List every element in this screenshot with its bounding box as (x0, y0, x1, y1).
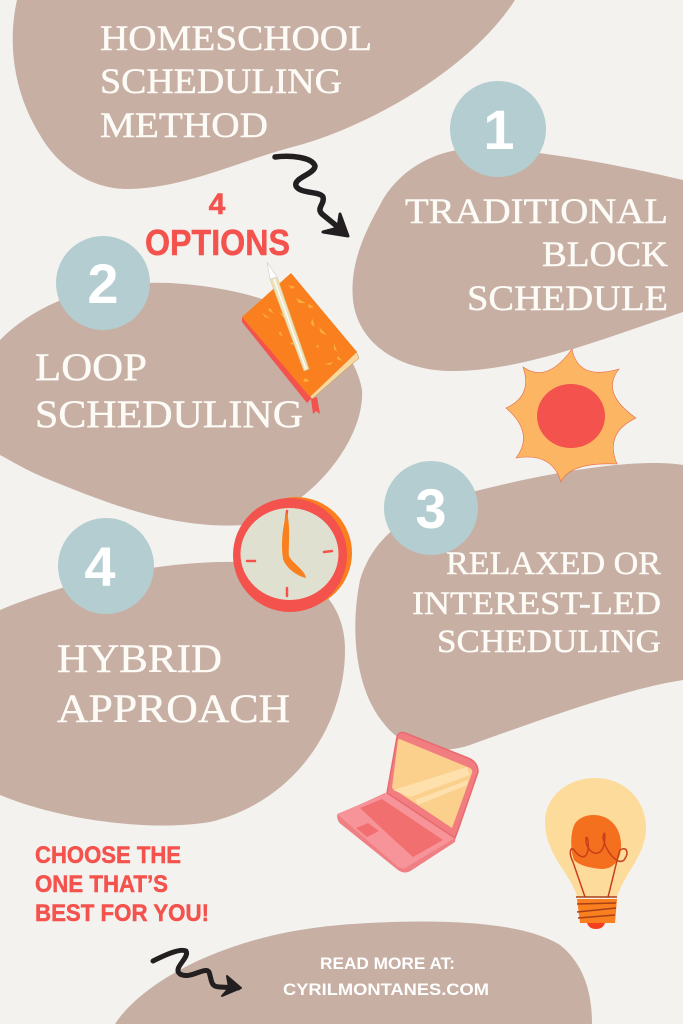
heading: loop scheduling: LOOP (35, 346, 147, 389)
heading: loop scheduling: SCHEDULING (35, 393, 303, 436)
heading: hybrid approach (57, 636, 290, 731)
callout: choose the one that's best for you (35, 842, 209, 927)
icon: orange book with pencil (242, 262, 359, 414)
title (100, 18, 372, 145)
call to action: read more link (283, 954, 489, 999)
heading: traditional block schedule: BLOCK (542, 234, 668, 274)
badge: number 2 (56, 236, 150, 330)
heading: relaxed or interest-led scheduling: INTEREST-LED (412, 586, 661, 622)
title: SCHEDULING (100, 61, 342, 101)
panel: option 3 relaxed or interest-led scheduling (355, 461, 683, 750)
icon: sun (506, 349, 636, 482)
arrow: title to option 1 (275, 156, 348, 236)
bulb filament glow (571, 815, 621, 869)
title: HOMESCHOOL (100, 18, 372, 58)
icon: pencil (267, 262, 309, 371)
icon: light bulb (545, 778, 646, 929)
clock hour marks (247, 511, 332, 596)
badge: number 4: 4 (84, 535, 116, 598)
label: 4 options: OPTIONS (145, 222, 290, 263)
label: 4 options: 4 (209, 188, 226, 221)
laptop keyboard (360, 799, 443, 857)
panel: option 2 loop scheduling (0, 236, 362, 526)
heading: hybrid approach: HYBRID (57, 636, 222, 681)
bulb base (577, 899, 617, 923)
arrow: callout to read more (153, 950, 241, 996)
badge: number 3: 3 (415, 477, 447, 540)
heading: relaxed or interest-led scheduling: SCHEDULING (437, 624, 661, 660)
badge: number 4 (58, 518, 154, 614)
badge: number 1 (450, 81, 546, 177)
heading: hybrid approach: APPROACH (57, 686, 290, 731)
badge: number 1: 1 (483, 98, 515, 161)
heading: traditional block schedule: SCHEDULE (467, 278, 668, 318)
call to action: read more link: CYRILMONTANES.COM (283, 980, 489, 999)
panel: option 1 traditional block schedule (352, 81, 683, 371)
heading: relaxed or interest-led scheduling (412, 546, 661, 660)
sun core (537, 384, 605, 448)
heading: traditional block schedule (405, 191, 668, 318)
callout: choose the one that's best for you: CHOOSE THE (35, 842, 181, 869)
panel: title blob (13, 0, 515, 189)
heading: loop scheduling (35, 346, 303, 436)
bulb filament wire (570, 833, 627, 897)
icon: laptop (337, 732, 478, 872)
call to action: read more link: READ MORE AT: (320, 954, 455, 973)
icon: clock (233, 497, 352, 612)
heading: relaxed or interest-led scheduling: RELAXED OR (446, 546, 661, 582)
clock hands (282, 512, 306, 578)
badge: number 2: 2 (87, 252, 119, 315)
laptop trackpad (356, 823, 379, 837)
panel: read more blob (115, 922, 592, 1024)
callout: choose the one that's best for you: BEST FOR YOU! (35, 900, 209, 927)
panel: option 4 hybrid approach (0, 518, 345, 826)
heading: traditional block schedule: TRADITIONAL (405, 191, 668, 231)
callout: choose the one that's best for you: ONE THAT’S (35, 871, 168, 898)
badge: number 3 (384, 461, 478, 555)
title: METHOD (100, 105, 268, 145)
label: 4 options (145, 188, 290, 263)
